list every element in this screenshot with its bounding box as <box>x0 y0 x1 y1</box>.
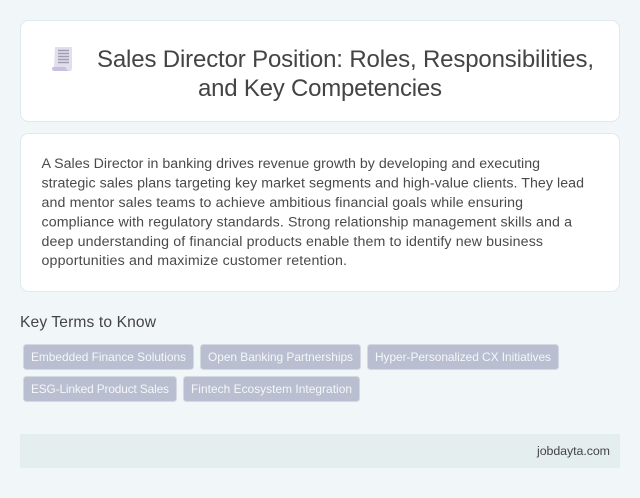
text block: description: compliance with regulatory standards. Strong relationship management skills and a <box>42 214 572 230</box>
text block: description: deep understanding of financial products enable them to identify new business <box>42 234 543 250</box>
chip: ESG-Linked Product Sales: ESG-Linked Product Sales <box>31 382 169 396</box>
chip: Open Banking Partnerships <box>200 344 360 370</box>
footer <box>20 434 620 468</box>
text block: description: opportunities and maximize customer retention. <box>42 253 347 269</box>
chip: Embedded Finance Solutions: Embedded Finance Solutions <box>31 350 186 364</box>
title: Sales Director Position: Roles, Responsibilities, <box>97 46 594 73</box>
chip: Hyper-Personalized CX Initiatives <box>368 344 558 370</box>
chip: Fintech Ecosystem Integration: Fintech Ecosystem Integration <box>191 382 352 396</box>
heading: key terms: Key Terms to Know <box>20 314 157 331</box>
text block: description: and mentor sales teams to achieve ambitious financial goals while ensuring <box>42 195 523 211</box>
icon: document <box>52 47 72 71</box>
chip: Fintech Ecosystem Integration <box>184 376 360 402</box>
text block: description: strategic sales plans targeting key market segments and high-value clients. They lead <box>42 176 584 192</box>
text block: description: A Sales Director in banking drives revenue growth by developing and executing <box>42 156 540 172</box>
footer source text: jobdayta.com <box>536 444 610 458</box>
panel: description card <box>20 134 620 292</box>
chip: ESG-Linked Product Sales <box>24 376 176 402</box>
chip: Embedded Finance Solutions <box>24 344 194 370</box>
chip: Open Banking Partnerships: Open Banking Partnerships <box>208 350 353 364</box>
text block: description <box>42 156 584 269</box>
chip: Hyper-Personalized CX Initiatives: Hyper-Personalized CX Initiatives <box>375 350 551 364</box>
title <box>97 46 594 102</box>
title: and Key Competencies <box>198 75 442 102</box>
panel: header card <box>20 20 620 122</box>
